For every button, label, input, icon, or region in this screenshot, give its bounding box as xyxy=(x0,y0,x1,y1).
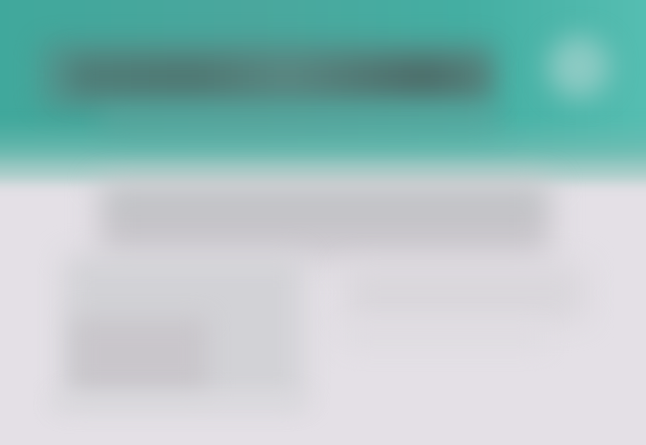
heading halo xyxy=(40,42,495,108)
panel footer xyxy=(50,395,305,411)
heading xyxy=(68,58,488,94)
icon: header circle xyxy=(548,36,610,98)
intro text block xyxy=(100,182,550,258)
text block: right lower xyxy=(345,325,545,349)
chart body xyxy=(72,318,207,392)
text block: right xyxy=(345,266,585,320)
panel: left chart xyxy=(64,256,304,401)
header lower fade xyxy=(0,120,646,182)
header band xyxy=(0,0,646,165)
subheading xyxy=(100,112,500,132)
